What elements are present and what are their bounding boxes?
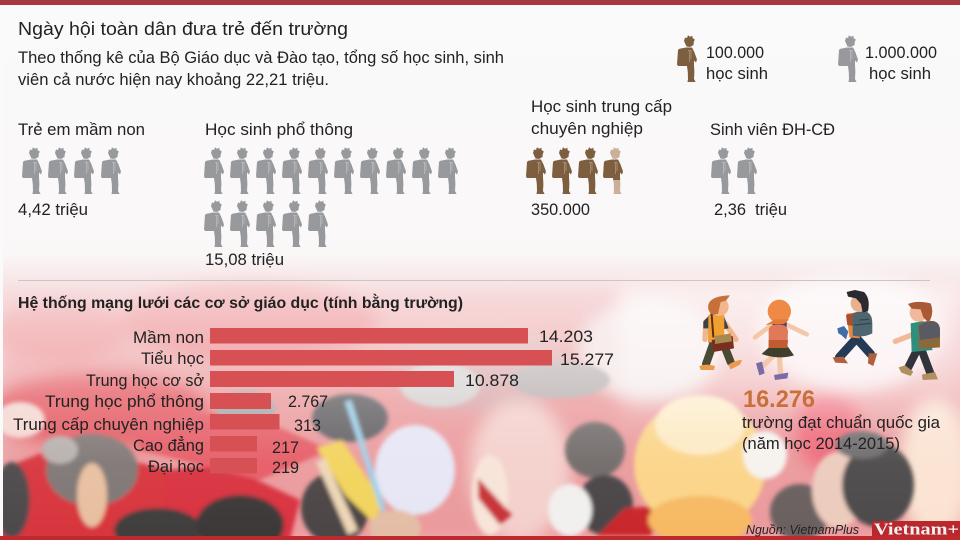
panel: vocational students: Học sinh trung cấp (531, 98, 672, 116)
bar chart heading: Hệ thống mạng lưới các cơ sở giáo dục (tính bằng trường) (18, 294, 463, 312)
panel: preschool children: Trẻ em mầm non (18, 121, 145, 139)
bar values: 10.878 (465, 371, 519, 390)
panel: university students (710, 121, 835, 219)
panel: general school pupils (204, 121, 458, 269)
bars (210, 328, 552, 474)
category labels: Trung học cơ sở (86, 371, 204, 390)
pictogram: 15 gray students (204, 147, 458, 247)
category labels (13, 328, 204, 476)
title: Ngày hội toàn dân đưa trẻ đến trường (18, 19, 348, 39)
bar values: 313 (294, 416, 321, 435)
logo: Vietnam+: Vietnam+ (874, 520, 959, 538)
category labels: Đại học (148, 457, 204, 476)
callout: national standard schools: (năm học 2014-2015) (742, 435, 900, 453)
girl with pink backpack (755, 300, 807, 380)
bar values: 219 (272, 458, 299, 477)
callout: national standard schools (742, 386, 941, 453)
intro paragraph (18, 49, 504, 89)
legend: 1.000.000 students: học sinh (869, 65, 931, 83)
legend: 1.000.000 students: 1.000.000 (865, 44, 937, 62)
bar values: 2.767 (288, 392, 328, 411)
bar values: 217 (272, 438, 299, 457)
category labels: Tiểu học (141, 349, 204, 368)
top bar (0, 0, 960, 5)
illustration: four students walking (699, 290, 940, 380)
panel: preschool children: 4,42 triệu (18, 201, 88, 219)
source credit: Nguồn: VietnamPlus (746, 522, 859, 537)
pictogram: 2 gray students (711, 147, 757, 194)
intro paragraph: Theo thống kê của Bộ Giáo dục và Đào tạo, tổng số học sinh, sinh (18, 49, 504, 67)
legend: 100.000 students: 100.000 (706, 44, 764, 62)
category labels: Trung học phổ thông (45, 392, 204, 411)
panel: university students: Sinh viên ĐH-CĐ (710, 121, 835, 139)
panel: vocational students (526, 98, 672, 219)
panel: general school pupils: Học sinh phổ thông (205, 121, 353, 139)
bar values: 14.203 (539, 327, 593, 346)
icon: gray student (838, 35, 858, 82)
category labels: Cao đẳng (133, 436, 204, 455)
panel: vocational students: chuyên nghiệp (531, 120, 643, 138)
callout: national standard schools: trường đạt chuẩn quốc gia (742, 414, 941, 432)
panel: university students: 2,36 triệu (714, 201, 787, 219)
category labels: Mầm non (133, 328, 204, 347)
student with orange vest (699, 295, 742, 370)
panel: vocational students: 350.000 (531, 201, 590, 219)
bar values (272, 327, 614, 477)
icon: brown student (677, 35, 697, 82)
legend: 100.000 students (677, 35, 768, 83)
panel: preschool children (18, 121, 145, 219)
boy with gray-tan backpack (895, 302, 940, 380)
intro paragraph: viên cả nước hiện nay khoảng 22,21 triệu. (18, 71, 329, 89)
pictogram: 3.5 brown students (526, 147, 623, 194)
bar values: 15.277 (560, 350, 614, 369)
panel: general school pupils: 15,08 triệu (205, 251, 284, 269)
legend: 100.000 students: học sinh (706, 65, 768, 83)
category labels: Trung cấp chuyên nghiệp (13, 415, 204, 434)
legend: 1.000.000 students (838, 35, 937, 83)
bar chart: education institutions (13, 327, 614, 477)
bottom bar (0, 536, 960, 540)
callout: national standard schools: 16.276 (743, 386, 815, 413)
pictogram: 4 gray students (22, 147, 121, 194)
boy with teal backpack (833, 290, 877, 366)
